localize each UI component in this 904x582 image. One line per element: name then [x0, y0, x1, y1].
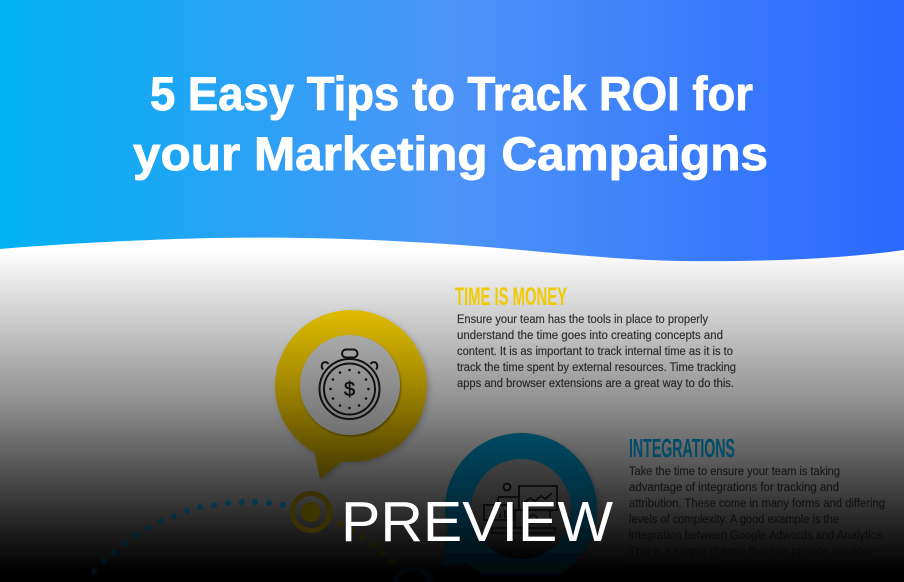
- body text: integrations: advantage of integrations for tracking and: [629, 482, 839, 494]
- bubble: time is money: [275, 310, 427, 479]
- heading: time is money: TIME IS MONEY: [455, 283, 567, 311]
- body text: integrations: integration between Google Adwords and Analytics.: [629, 530, 885, 542]
- body text: time is money: understand the time goes into creating concepts and: [457, 330, 723, 342]
- body text: integrations: levels of complexity. A good example is the: [629, 514, 839, 526]
- body text: time is money: apps and browser extensions are a great way to do this.: [457, 378, 734, 390]
- title: your Marketing Campaigns: [133, 127, 768, 180]
- body text: time is money: content. It is as important to track internal time as it is to: [457, 346, 733, 358]
- body text: time is money: Ensure your team has the tools in place to properly: [457, 314, 708, 326]
- body text: integrations: data for your team.: [629, 562, 724, 574]
- title: 5 Easy Tips to Track ROI for: [150, 67, 753, 120]
- header band with wave: [0, 0, 904, 261]
- preview watermark: PREVIEW: [341, 490, 613, 554]
- marker: teal target: [394, 568, 432, 582]
- title: [133, 67, 768, 180]
- icon: stopwatch: [320, 350, 380, 419]
- inner circle: teal bubble: [471, 459, 571, 559]
- preview fade overlay: [0, 230, 904, 582]
- text block: integrations: [629, 433, 885, 574]
- dotted path: yellow: [337, 521, 395, 565]
- inner circle: yellow bubble: [300, 335, 400, 435]
- body text: integrations: This is a simple change that can provide valuable: [629, 546, 873, 558]
- icon: analytics workstation: [484, 484, 557, 533]
- body text: time is money: [457, 314, 736, 390]
- icon: stopwatch: $: [344, 379, 355, 401]
- body text: integrations: attribution. These come in many forms and differing: [629, 498, 885, 510]
- text block: time is money: [455, 283, 736, 390]
- dotted path: teal: [91, 499, 286, 574]
- body text: integrations: Take the time to ensure your team is taking: [629, 466, 840, 478]
- bubble: integrations: [442, 433, 597, 582]
- marker: yellow target: [292, 494, 330, 530]
- heading: integrations: INTEGRATIONS: [629, 433, 735, 463]
- body text: time is money: track the time spent by external resources. Time tracking: [457, 362, 736, 374]
- speech bubble: yellow: [275, 310, 427, 479]
- speech bubble: teal: [442, 433, 597, 582]
- body text: integrations: [629, 466, 885, 574]
